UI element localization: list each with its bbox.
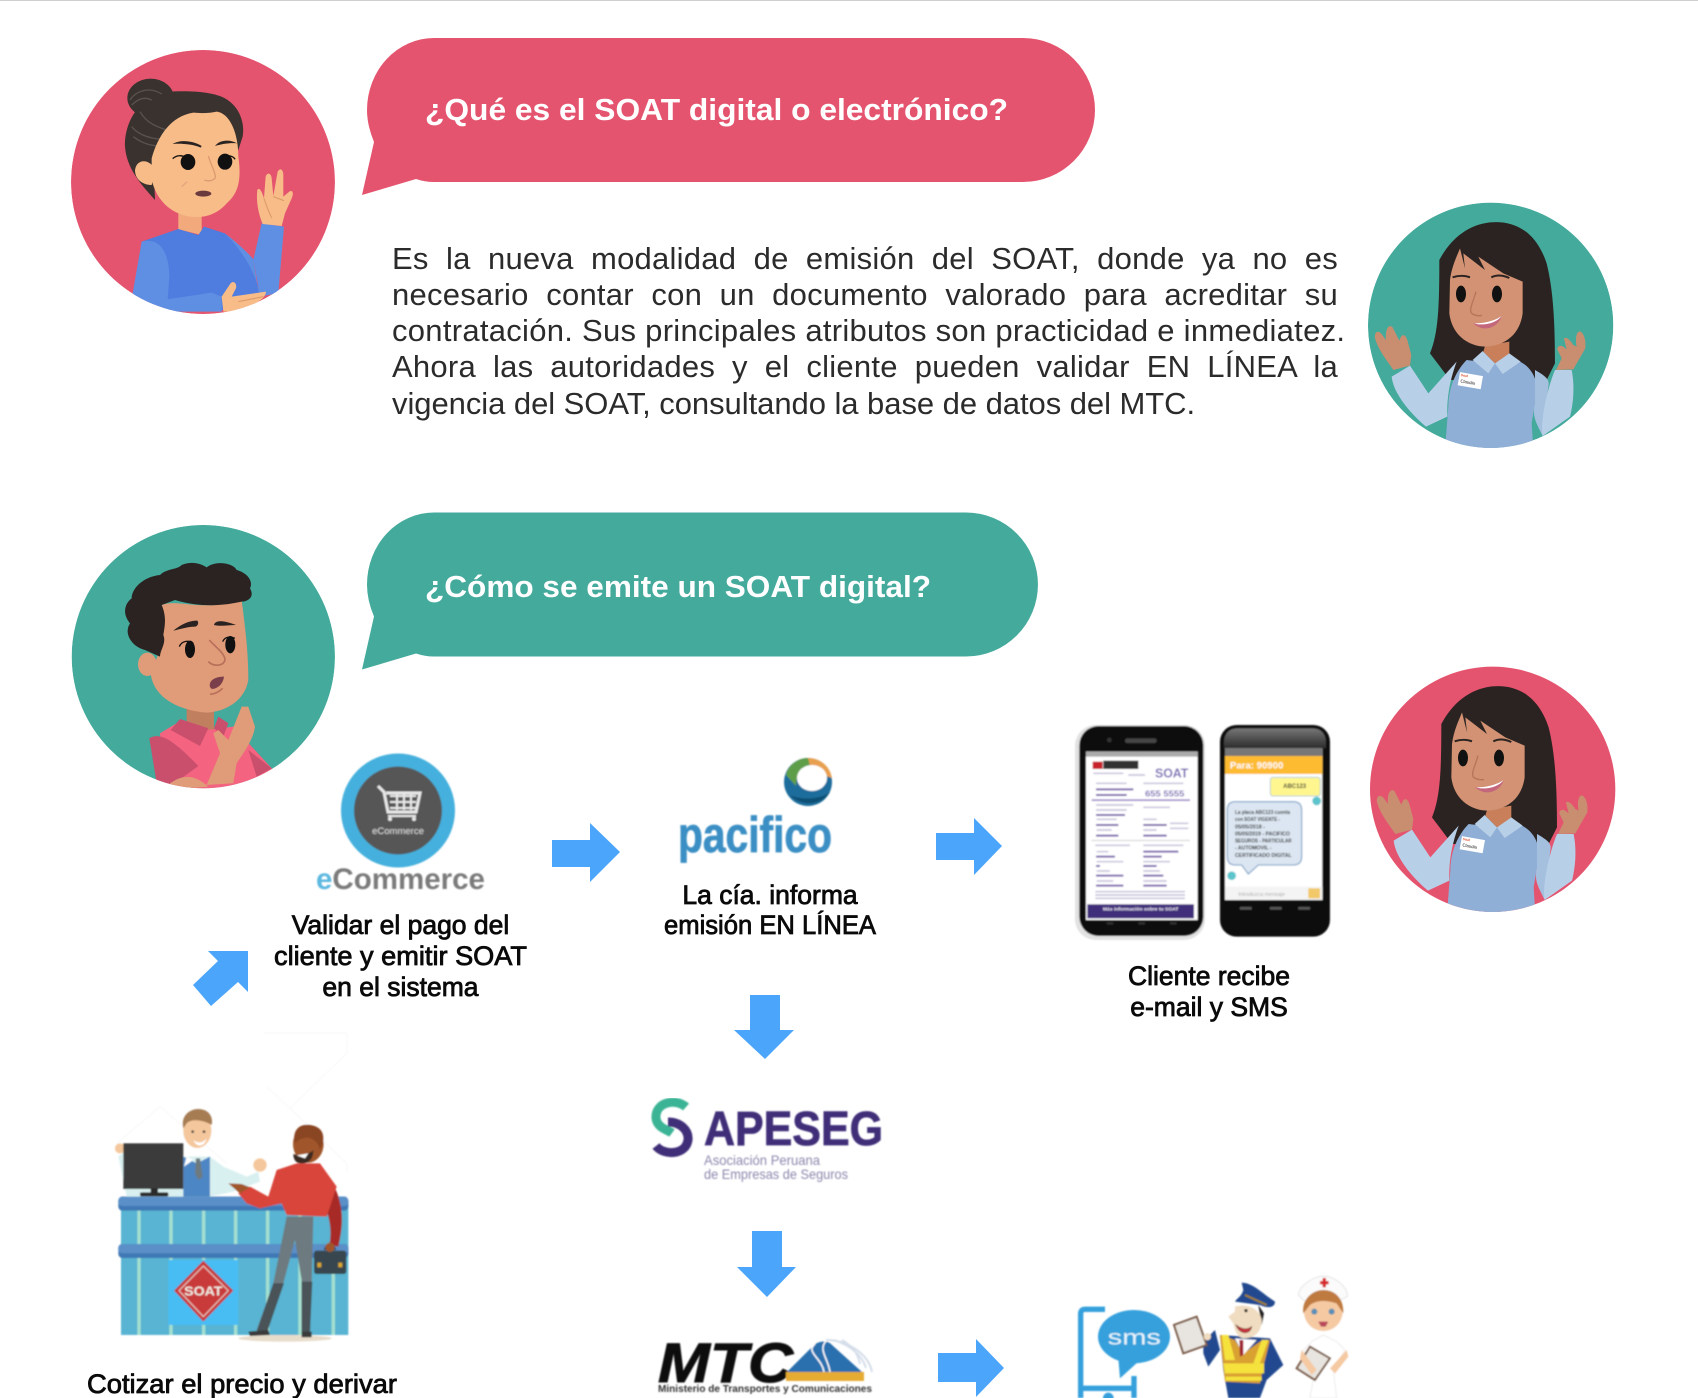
agent behind counter [115,1109,267,1197]
top border line [0,0,1698,1]
illustration: SMS phone, policeman and nurse [1081,1276,1348,1398]
text block: definition of SOAT digital: Es la nueva modalidad de emisión del SOAT, donde ya no es [392,241,1338,276]
text block: definition of SOAT digital: contratación. Sus principales atributos son practicidad e inmediatez. [392,313,1345,348]
icon: pacifico logo [678,758,832,863]
phones: client e-mail and SMS screens [1075,725,1330,940]
caption: company reports issuance [664,880,876,940]
text block: definition of SOAT digital [392,241,1345,421]
caption: validate payment: Validar el pago del [292,910,509,940]
caption: validate payment: en el sistema [322,972,479,1002]
caption: client receives e-mail and SMS: e-mail y SMS [1130,992,1288,1022]
icon: eCommerce logo [316,754,485,896]
icon: SMS phone [1081,1309,1170,1398]
avatar: smiling woman on teal circle: Soat [1460,373,1469,378]
icon: eCommerce logo: eCommerce [372,826,424,837]
counter [118,1197,348,1335]
phone with SMS conversation: La placa ABC123 cuenta [1235,810,1291,816]
speech bubble: what is SOAT digital: ¿Qué es el SOAT digital o electrónico? [425,92,1008,127]
watermark lines [117,1033,347,1173]
icon: MTC logo [658,1331,872,1395]
icon: eCommerce logo: eCommerce [316,863,485,896]
speech bubble: how to issue SOAT digital: ¿Cómo se emite un SOAT digital? [425,569,931,604]
icon: policeman [1174,1283,1283,1398]
caption: client receives e-mail and SMS [1128,961,1290,1022]
avatar: smiling woman on teal circle: Claudia [1460,378,1476,386]
caption: company reports issuance: La cía. informa [682,880,858,910]
phone with SMS conversation: 05/05/2019 - PACIFICO [1235,831,1291,837]
avatar: curly haired man on teal circle [72,525,335,793]
phone with SMS conversation: - AUTOMOVIL - [1235,846,1272,852]
caption: client receives e-mail and SMS: Cliente recibe [1128,961,1290,991]
icon: APESEG logo: de Empresas de Seguros [704,1166,848,1182]
text block: definition of SOAT digital: vigencia del SOAT, consultando la base de datos del MTC. [392,386,1195,421]
caption: validate payment: cliente y emitir SOAT [274,941,527,971]
avatar: smiling woman on pink circle [1370,667,1615,914]
phone with e-mail certificate: SOAT [1155,765,1188,780]
icon: SMS phone: sms [1108,1325,1161,1349]
counter: SOAT [184,1284,223,1298]
icon: pacifico logo: pacifico [678,807,832,863]
text block: definition of SOAT digital: Ahora las autoridades y el cliente pueden validar EN LÍNEA la [392,349,1338,384]
phone with SMS conversation: CERTIFICADO DIGITAL [1235,853,1292,859]
icon: MTC logo: Ministerio de Transportes y Comunicaciones [658,1384,872,1395]
speech bubble: how to issue SOAT digital [362,512,1038,670]
caption: validate payment [274,910,527,1002]
icon: nurse [1297,1276,1348,1398]
arrow: APESEG to MTC [737,1231,796,1297]
caption: company reports issuance: emisión EN LÍNEA [664,910,876,940]
phone with e-mail certificate: Más información sobre tu SOAT [1103,907,1178,913]
icon: APESEG logo: APESEG [704,1103,883,1156]
phone with SMS conversation: SEGUROS - PARTICULAR [1235,839,1292,845]
phone with SMS conversation: Para: 90900 [1230,761,1283,771]
icon: MTC logo: MTC [658,1331,795,1394]
phone with e-mail certificate: 655 5555 [1145,789,1185,799]
computer monitor [123,1143,183,1196]
arrow: eCommerce to pacifico [552,823,620,882]
arrow: MTC to authorities [938,1339,1004,1397]
illustration: agent and customer at SOAT counter [115,1033,348,1342]
icon: APESEG logo: Asociación Peruana [704,1152,820,1168]
avatar: woman with bun on pink circle [71,50,335,314]
phone with SMS conversation [1220,725,1330,937]
icon: APESEG logo [656,1102,883,1182]
arrow: pacifico to phones [936,818,1002,875]
arrow: up right to eCommerce [193,951,248,1006]
avatar: smiling woman on pink circle: Soat [1462,837,1471,842]
avatar: smiling woman on teal circle [1368,203,1613,450]
arrow: pacifico to APESEG [734,995,794,1059]
phone with SMS conversation: 05/05/2018 - [1235,824,1265,830]
phone with SMS conversation: con SOAT VIGENTE - [1235,817,1280,823]
customer with briefcase [228,1125,346,1342]
phone with SMS conversation: Introduzca mensaje [1238,892,1285,898]
phone with e-mail certificate [1075,725,1205,940]
avatar: smiling woman on pink circle: Claudia [1462,842,1478,850]
speech bubble: what is SOAT digital [362,38,1095,195]
text block: definition of SOAT digital: necesario contar con un documento valorado para acreditar su [392,277,1338,312]
phone with SMS conversation: ABC123 [1283,784,1307,790]
